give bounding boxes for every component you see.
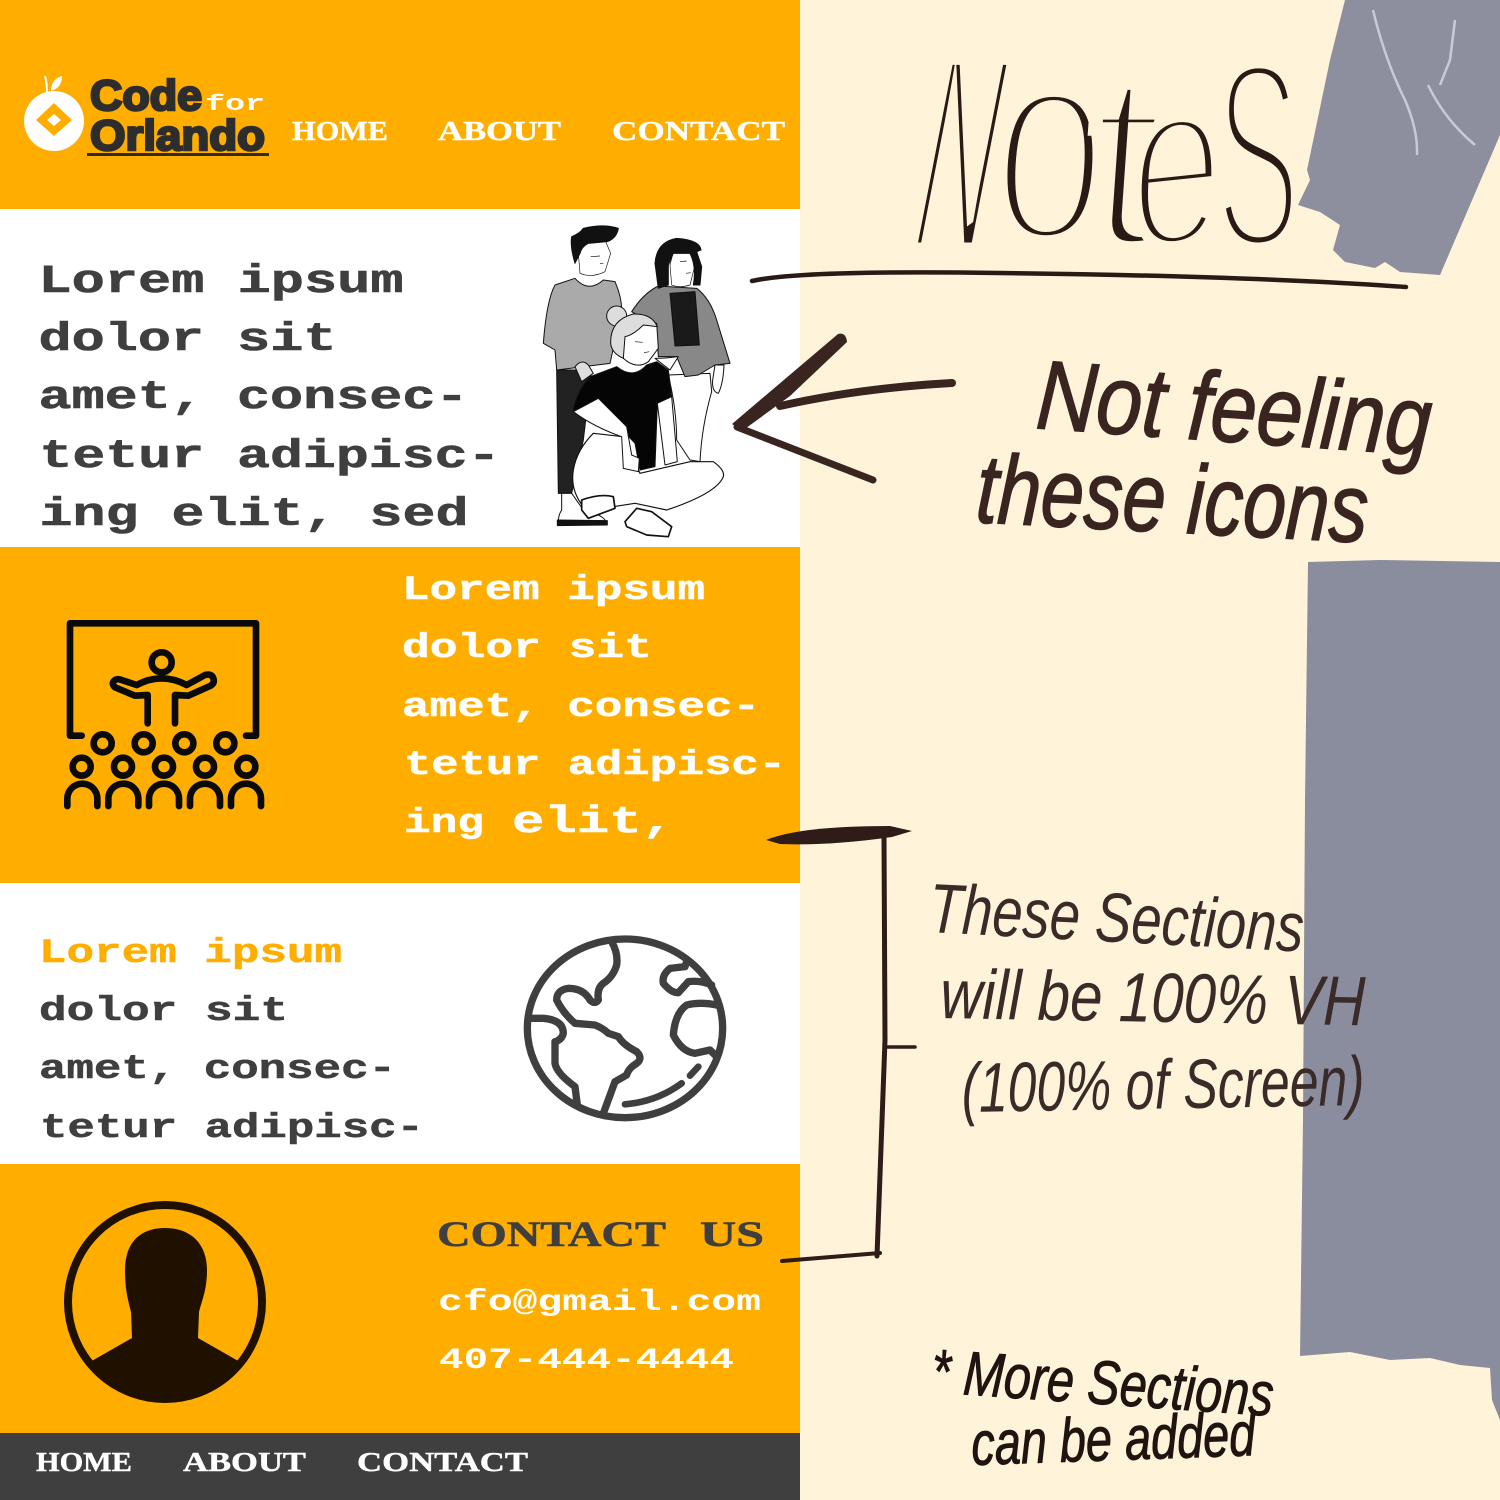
section 2 text: ing [404, 805, 484, 843]
tape: right side [1300, 560, 1500, 1420]
icon: presenter and audience [67, 623, 261, 806]
note: more sections can be added [929, 1337, 1276, 1479]
note: more sections can be added: * More Sections [929, 1337, 1276, 1430]
logo wordmark: Code [90, 72, 202, 120]
section 1 text: Lorem ipsum [38, 260, 404, 305]
section 3 text: amet, consec- [39, 1051, 396, 1089]
footer links: ABOUT [183, 1447, 306, 1477]
icon: person avatar [68, 1205, 262, 1410]
section 4: contact [0, 1164, 800, 1433]
handwritten title: Notes: N [893, 0, 1031, 310]
top navigation [292, 116, 785, 146]
top navigation: CONTACT [612, 116, 785, 146]
top navigation: ABOUT [438, 116, 561, 146]
tape: top right [1298, 0, 1500, 275]
contact heading: US [700, 1214, 764, 1254]
people illustration [543, 226, 730, 537]
handwritten title: Notes [893, 0, 1300, 310]
section 3 text: Lorem ipsum [39, 935, 342, 973]
bracket spanning sections [766, 826, 915, 1261]
standing man [543, 226, 622, 526]
note: more sections can be added: can be added [970, 1400, 1258, 1479]
section 1 text: ing elit, sed [40, 493, 468, 538]
logo wordmark: for [205, 92, 265, 117]
logo orange mark [24, 76, 84, 151]
notes background [800, 0, 1500, 1500]
section 2 text: tetur adipisc- [404, 747, 786, 785]
note: sections 100% VH: will be 100% VH [940, 955, 1366, 1040]
contact heading [437, 1214, 764, 1254]
section 2 text: elit, [512, 801, 674, 844]
footer links: HOME [36, 1447, 132, 1477]
footer links [36, 1447, 528, 1477]
handwritten title: Notes: e [1126, 22, 1229, 301]
section 2: workshop [0, 547, 800, 883]
note: sections 100% VH: (100% of Screen) [961, 1042, 1365, 1127]
contact heading: CONTACT [437, 1214, 666, 1254]
section 2 text: Lorem ipsum [402, 572, 705, 610]
note: sections 100% VH: These Sections [927, 869, 1306, 967]
section 3: global [0, 883, 800, 1164]
logo [24, 72, 269, 160]
section 3 text: dolor sit [39, 993, 288, 1031]
handwritten title: Notes: S [1216, 8, 1300, 305]
note: not feeling these icons: Not feeling [1034, 339, 1435, 477]
note: not feeling these icons: these icons [974, 433, 1371, 563]
handwritten title: Notes: t [1079, 18, 1174, 299]
footer links: CONTACT [357, 1447, 528, 1477]
section 1 text: tetur adipisc- [40, 435, 500, 480]
icon: globe [527, 939, 723, 1118]
logo wordmark [87, 72, 269, 160]
section 1 text: dolor sit [38, 318, 336, 363]
contact details [437, 1214, 764, 1378]
standing woman [632, 238, 730, 462]
section 1 text [38, 260, 500, 538]
title underline [752, 272, 1406, 287]
contact details: 407-444-4444 [439, 1344, 734, 1378]
contact details: cfo@gmail.com [438, 1286, 761, 1320]
logo wordmark: Orlando [90, 112, 265, 160]
section 3 text: tetur adipisc- [40, 1110, 424, 1148]
section 1: intro [0, 209, 800, 547]
section 2 text: amet, consec- [402, 689, 760, 727]
section 2 text: dolor sit [402, 630, 652, 668]
section 2 text [402, 572, 786, 844]
arrow pointing at icons [732, 334, 952, 480]
header band [0, 0, 800, 209]
section 1 text: amet, consec- [38, 376, 468, 421]
seated woman [573, 306, 724, 537]
note: not feeling these icons [974, 339, 1435, 563]
top navigation: HOME [292, 116, 388, 146]
section 3 text [39, 935, 424, 1148]
note: sections 100% VH [927, 869, 1366, 1127]
footer navigation [0, 1433, 800, 1500]
